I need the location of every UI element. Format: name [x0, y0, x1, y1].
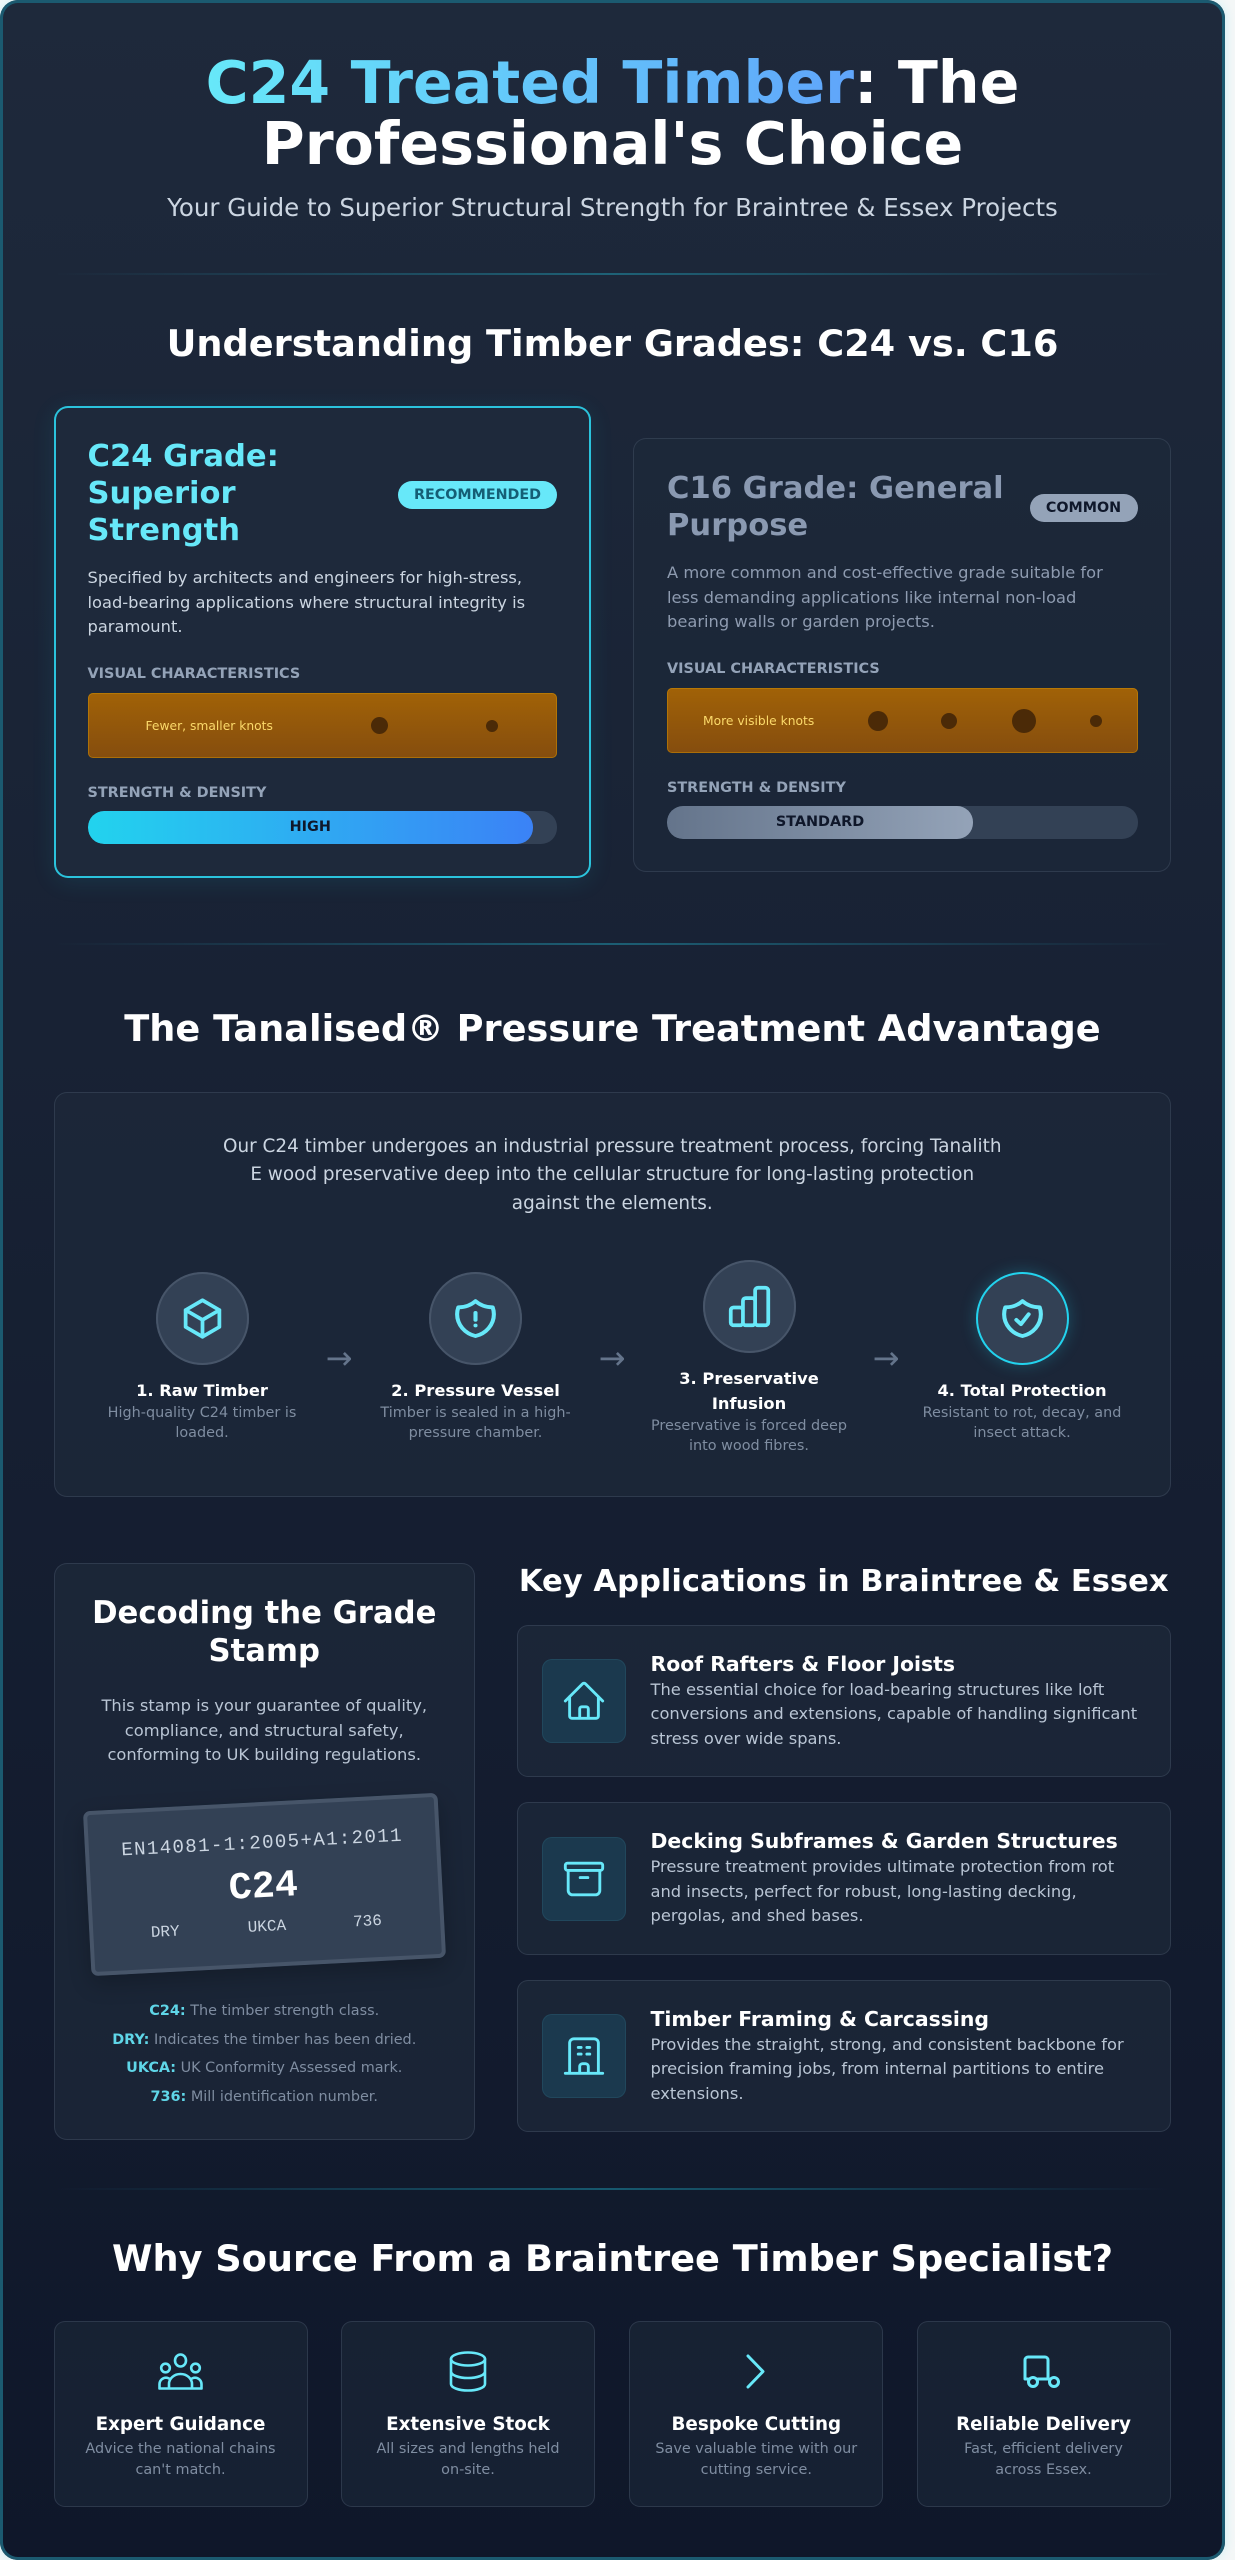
stamp legend: DRY: Indicates the timber has been dried.	[112, 2032, 416, 2048]
application text: Pressure treatment provides ultimate protection from rot	[650, 1857, 1114, 1876]
knot	[941, 712, 957, 728]
step text: High-quality C24 timber is	[108, 1405, 296, 1421]
strength fill 95%	[88, 811, 533, 844]
process intro text	[223, 1136, 1002, 1214]
panel: treatment process	[54, 1092, 1171, 1497]
label: strength and density: STRENGTH & DENSITY	[667, 780, 846, 796]
heading: pressure treatment: The Tanalised® Pressure Treatment Advantage	[124, 1007, 1101, 1050]
grade stamp	[83, 1792, 446, 1976]
panel: expert guidance	[54, 2321, 308, 2507]
card text: cutting service.	[701, 2462, 812, 2478]
application text	[650, 1857, 1114, 1925]
step title	[679, 1369, 819, 1412]
step 1: raw timber	[108, 1272, 296, 1441]
panel: extensive stock	[341, 2321, 595, 2507]
panel: C24 grade card	[54, 406, 591, 878]
card text: can't match.	[135, 2462, 226, 2478]
knot	[486, 720, 498, 732]
panel: C16 grade card	[633, 438, 1171, 872]
C24 card title: Superior	[88, 476, 236, 511]
application title: Decking Subframes & Garden Structures	[650, 1829, 1118, 1853]
mark: mill number: 736	[353, 1911, 382, 1931]
C16 card title	[667, 471, 1004, 543]
step text: into wood fibres.	[689, 1438, 809, 1454]
C24 description: Specified by architects and engineers for high-stress,	[88, 568, 522, 587]
card text: across Essex.	[995, 2462, 1092, 2478]
panel heading: Stamp	[209, 1634, 320, 1669]
stamp legend: C24: The timber strength class.	[149, 2003, 379, 2019]
application text: precision framing jobs, from internal partitions to entire	[650, 2059, 1104, 2078]
C16 description: A more common and cost-effective grade suitable for	[667, 563, 1103, 582]
step text	[651, 1418, 847, 1454]
mark: dry: DRY	[150, 1922, 180, 1941]
title	[206, 49, 1019, 178]
arrow: →	[326, 1339, 352, 1377]
process intro text: Our C24 timber undergoes an industrial pressure treatment process, forcing Tanalith	[223, 1136, 1002, 1157]
C16 card title: C16 Grade: General	[667, 471, 1004, 506]
card text	[655, 2441, 858, 2478]
application text: Provides the straight, strong, and consistent backbone for	[650, 2034, 1124, 2054]
label: visual characteristics: VISUAL CHARACTERISTICS	[88, 666, 300, 682]
step text: loaded.	[175, 1425, 229, 1441]
arrow: →	[873, 1339, 899, 1377]
knot	[1090, 714, 1102, 726]
C24 card title: Strength	[88, 513, 240, 548]
stamp legend	[112, 2003, 416, 2105]
wood sample with many knots	[667, 688, 1138, 753]
card title: Expert Guidance	[96, 2414, 265, 2435]
knot	[1012, 708, 1036, 733]
C24 description	[88, 568, 525, 636]
heading: why source from a specialist: Why Source From a Braintree Timber Specialist?	[112, 2237, 1113, 2280]
step 3: preservative infusion	[651, 1260, 847, 1454]
application text	[650, 2034, 1124, 2102]
panel intro text	[101, 1696, 427, 1764]
icon: archive box	[542, 1836, 626, 1920]
step text	[108, 1405, 296, 1441]
icon: house	[542, 1659, 626, 1743]
card text: Advice the national chains	[85, 2441, 276, 2457]
step title: Infusion	[712, 1394, 786, 1412]
step text: Timber is sealed in a high-	[380, 1405, 571, 1421]
stamp grade: C24	[228, 1863, 299, 1910]
application text: and insects, perfect for robust, long-lasting decking,	[650, 1882, 1077, 1900]
card text: Fast, efficient delivery	[964, 2441, 1123, 2457]
arrow: →	[599, 1339, 625, 1377]
stamp legend: 736: Mill identification number.	[151, 2089, 378, 2105]
application text: conversions and extensions, capable of handling significant	[650, 1704, 1137, 1723]
panel: decking	[516, 1802, 1171, 1954]
title: C24 Treated Timber: The	[206, 49, 1019, 117]
subtitle: Your Guide to Superior Structural Strength for Braintree & Essex Projects	[167, 193, 1058, 222]
strength fill 95%: HIGH	[290, 819, 331, 835]
C16 card title: Purpose	[667, 508, 808, 543]
icon: building	[542, 2014, 626, 2098]
panel: decoding the grade stamp	[54, 1563, 475, 2140]
icon: chevron	[746, 2354, 764, 2389]
process intro text: E wood preservative deep into the cellular structure for long-lasting protection	[250, 1164, 974, 1185]
wood caption: More visible knots	[703, 714, 814, 728]
step title: 3. Preservative	[679, 1369, 819, 1388]
mark: UKCA: UKCA	[247, 1916, 287, 1936]
heading: understanding timber grades: Understanding Timber Grades: C24 vs. C16	[167, 322, 1058, 365]
panel: bespoke cutting	[629, 2321, 883, 2507]
label: strength and density: STRENGTH & DENSITY	[88, 785, 266, 801]
application title: Roof Rafters & Floor Joists	[650, 1652, 955, 1676]
wood caption: Fewer, smaller knots	[146, 719, 273, 733]
step text: insect attack.	[973, 1425, 1071, 1441]
icon: bars	[702, 1260, 796, 1353]
card text	[964, 2441, 1123, 2478]
C24 card title	[88, 439, 279, 548]
step title: 1. Raw Timber	[136, 1381, 268, 1400]
card text: on-site.	[441, 2462, 495, 2478]
stamp legend: UKCA: UK Conformity Assessed mark.	[126, 2060, 402, 2076]
card title: Extensive Stock	[386, 2414, 550, 2435]
application text	[650, 1680, 1137, 1748]
step text: Preservative is forced deep	[651, 1418, 847, 1434]
wood sample with few knots	[88, 693, 557, 758]
heading: key applications: Key Applications in Braintree & Essex	[519, 1564, 1169, 1599]
application text: pergolas, and shed bases.	[650, 1906, 864, 1925]
C16 description: less demanding applications like internal non-load	[667, 588, 1076, 606]
panel intro text: conforming to UK building regulations.	[107, 1745, 421, 1764]
application title: Timber Framing & Carcassing	[650, 2006, 989, 2030]
icon: shield with check	[976, 1272, 1068, 1365]
step text: pressure chamber.	[409, 1425, 542, 1441]
panel intro text: compliance, and structural safety,	[125, 1720, 404, 1740]
card text: Save valuable time with our	[655, 2441, 857, 2457]
icon: people	[158, 2353, 203, 2390]
C24 description: load-bearing applications where structural integrity is	[88, 592, 525, 612]
card title: Bespoke Cutting	[672, 2414, 841, 2435]
badge: common: COMMON	[1046, 500, 1121, 516]
C16 description	[667, 563, 1103, 631]
step text: Resistant to rot, decay, and	[923, 1405, 1121, 1421]
icon: cube	[156, 1272, 248, 1365]
C24 description: paramount.	[88, 617, 183, 636]
icon: truck	[1024, 2356, 1060, 2388]
card text	[85, 2441, 276, 2478]
step title: 4. Total Protection	[937, 1381, 1107, 1400]
step title: 2. Pressure Vessel	[391, 1381, 560, 1400]
stamp marks	[150, 1911, 382, 1941]
card title: Reliable Delivery	[956, 2414, 1131, 2435]
panel: roof rafters	[516, 1624, 1171, 1777]
stamp standard code: EN14081-1:2005+A1:2011	[121, 1824, 403, 1861]
label: visual characteristics: VISUAL CHARACTERISTICS	[667, 661, 880, 677]
knot	[868, 710, 888, 730]
step text	[923, 1405, 1121, 1441]
strength fill 65%: STANDARD	[776, 814, 864, 830]
icon: shield with exclamation	[429, 1272, 522, 1365]
C16 description: bearing walls or garden projects.	[667, 612, 935, 631]
panel intro text: This stamp is your guarantee of quality,	[101, 1696, 427, 1715]
card text	[376, 2441, 560, 2478]
strength bar: high	[88, 811, 557, 844]
strength bar: standard	[667, 806, 1138, 838]
title: Professional's Choice	[262, 110, 963, 178]
knot	[370, 717, 388, 734]
strength fill 65%	[667, 806, 973, 838]
badge: recommended	[398, 481, 557, 509]
step 4: total protection	[923, 1266, 1121, 1441]
panel heading	[92, 1596, 436, 1669]
process intro text: against the elements.	[512, 1193, 713, 1214]
application text: The essential choice for load-bearing structures like loft	[650, 1680, 1104, 1698]
icon: database	[450, 2351, 486, 2392]
panel: reliable delivery	[916, 2321, 1171, 2507]
step 2: pressure vessel	[380, 1272, 571, 1441]
application text: stress over wide spans.	[650, 1728, 841, 1748]
badge: recommended: RECOMMENDED	[414, 487, 541, 503]
C24 card title: C24 Grade:	[88, 439, 279, 474]
card text: All sizes and lengths held	[376, 2441, 560, 2457]
panel heading: Decoding the Grade	[92, 1596, 436, 1631]
step text	[380, 1405, 571, 1441]
badge: common	[1030, 494, 1138, 522]
application text: extensions.	[650, 2084, 744, 2102]
panel: timber framing	[516, 1980, 1171, 2132]
